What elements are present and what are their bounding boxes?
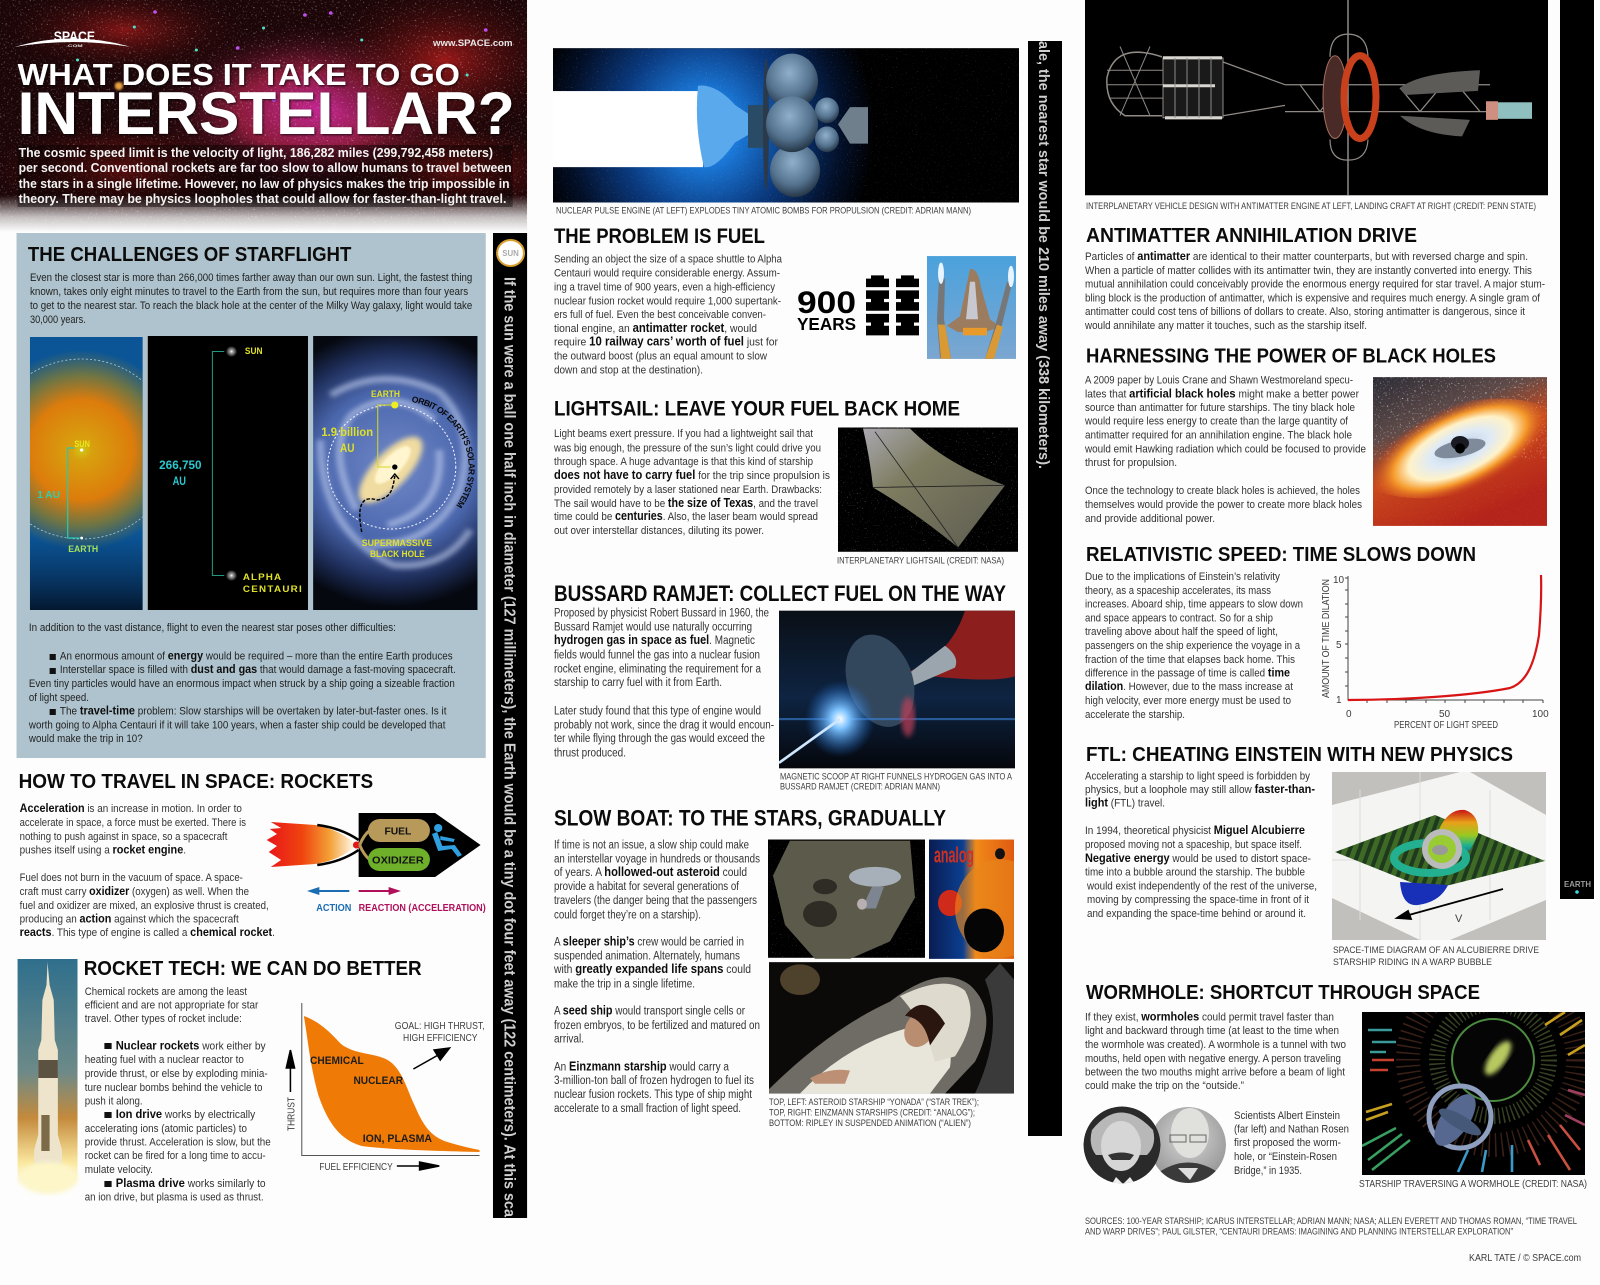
relativity text: difference in the passage of time is called time [1085, 666, 1291, 680]
heading: FTL: CHEATING EINSTEIN WITH NEW PHYSICS [1086, 744, 1513, 766]
analog magazine cover: analog [934, 844, 974, 868]
bussard image [779, 611, 1015, 768]
antimatter text: Particles of antimatter are identical to their matter counterparts, but with reversed charge and spin. [1085, 250, 1528, 263]
relativity text: and space appears to contract. So for a ship [1085, 612, 1273, 624]
fuel text: nuclear fusion rocket would require 1,000 supertank- [554, 295, 781, 307]
black holes text: antimatter required for an annihilation engine. The black hole [1085, 429, 1352, 442]
portrait caption: Scientists Albert Einstein [1234, 1110, 1340, 1122]
rocket tech text: efficient and are not appropriate for star [85, 1000, 259, 1011]
lightsail text: The sail would have to be the size of Texas, and the travel [554, 495, 818, 510]
section: wormhole [1084, 975, 1587, 1190]
heading: RELATIVISTIC SPEED: TIME SLOWS DOWN [1086, 544, 1476, 566]
fuel text: Centauri would require considerable energy. Assum- [554, 267, 780, 280]
diagram: sun to alpha centauri: 266,750 [159, 459, 202, 472]
y axis label: AMOUNT OF TIME DILATION [1321, 579, 1332, 698]
heading: THE PROBLEM IS FUEL [554, 225, 765, 248]
rocket tech text: an ion drive, but plasma is used as thrust. [85, 1192, 264, 1203]
diagram: sun to alpha centauri: AU [173, 475, 186, 488]
intro text: per second. Conventional rockets are far too slow to allow humans to travel between [19, 160, 512, 175]
lightsail text [553, 428, 830, 537]
time dilation chart: 50 [1439, 709, 1451, 720]
caption: bussard: BUSSARD RAMJET (CREDIT: ADRIAN MANN) [780, 781, 940, 792]
rocket tech text: accelerating ions (atomic particles) to [85, 1123, 247, 1135]
diagram: milky way galaxy: ORBIT OF EARTH’S SOLAR SYSTEM [412, 396, 475, 508]
black holes text: lates that artificial black holes might make a better power [1085, 387, 1359, 400]
rocket tech text: travel. Other types of rocket include: [85, 1013, 242, 1025]
portrait caption: (far left) and Nathan Rosen [1234, 1124, 1349, 1136]
wormhole text: the wormhole was created). A wormhole is a tunnel with two [1085, 1039, 1346, 1051]
rocket tech text: Nuclear rockets work either by [116, 1040, 266, 1052]
icon: sun [497, 240, 524, 266]
intro paragraph: 30,000 years. [30, 314, 86, 326]
space shuttle image [927, 256, 1016, 359]
time dilation chart: 0 [1346, 709, 1352, 720]
heading: HARNESSING THE POWER OF BLACK HOLES [1086, 345, 1496, 368]
fuel tank [368, 819, 430, 842]
rocket tech text: provide thrust. Acceleration is slow, but the [85, 1137, 271, 1148]
portrait caption: Bridge,” in 1935. [1234, 1165, 1302, 1177]
diagram: sun to earth 1 AU: EARTH [68, 544, 98, 555]
header banner [0, 0, 579, 232]
oxidizer tank [368, 848, 430, 871]
alcubierre diagram: V [1455, 913, 1463, 925]
rockets text: accelerate in space, a force must be exerted. There is [20, 817, 246, 829]
intro text: The cosmic speed limit is the velocity of light, 186,282 miles (299,792,458 meters) [19, 145, 493, 160]
difficulties list: of light speed. [29, 692, 89, 704]
caption: alcubierre: SPACE-TIME DIAGRAM OF AN ALCUBIERRE DRIVE [1333, 945, 1539, 956]
arrow labels [316, 903, 486, 914]
left column [0, 0, 528, 1218]
logo [14, 29, 131, 48]
black holes text: thrust for propulsion. [1085, 457, 1177, 469]
wormhole text: If they exist, wormholes could permit travel faster than [1085, 1010, 1334, 1024]
difficulties list: Interstellar space is filled with dust and gas that would damage a fast-moving spacecraft. [60, 663, 456, 676]
arrow labels: ACTION [316, 903, 351, 914]
rocket tech text: provide thrust, or else by exploding minia- [85, 1068, 268, 1080]
analog magazine cover [929, 840, 1014, 959]
vertical scale bar 2 [1028, 41, 1062, 1136]
red curve [1348, 575, 1541, 700]
bussard text: ter while flying through the gas would exceed the [554, 733, 765, 745]
asteroid starship image [768, 840, 925, 959]
antimatter text: mutual annihilation could conceivably provide the enormous energy required for star travel. A major stum- [1085, 279, 1545, 291]
FTL text: and expanding the space-time behind or around it. [1087, 908, 1306, 920]
lightsail text: out over interstellar distances, diluting its power. [554, 525, 764, 537]
logo: .COM [66, 43, 84, 48]
x axis label: PERCENT OF LIGHT SPEED [1394, 720, 1498, 731]
rockets text: reacts. This type of engine is called a chemical rocket. [20, 926, 275, 939]
caption: alcubierre: STARSHIP RIDING IN A WARP BUBBLE [1333, 957, 1492, 968]
arrow labels: REACTION (ACCELERATION) [359, 903, 486, 914]
rocket tech text [85, 986, 271, 1203]
diagram: sun to alpha centauri: CENTAURI [243, 584, 302, 595]
FTL text: physics, but a loophole may still allow faster-than- [1085, 783, 1315, 796]
relativity text: fraction of the time that elapses back home. This [1085, 654, 1295, 666]
slow boat text: suspended animation. Alternately, humans [554, 950, 740, 963]
diagram: sun to earth 1 AU [30, 337, 143, 610]
title: WHAT DOES IT TAKE TO GO [18, 56, 460, 92]
goal arrow [413, 1048, 450, 1069]
earth label: EARTH [1564, 879, 1591, 889]
wormhole text: could make the trip on the “outside.” [1085, 1080, 1244, 1092]
rocket diagram [267, 813, 486, 914]
bussard text: hydrogen gas in space as fuel. Magnetic [554, 633, 755, 647]
lightsail text: was big enough, the pressure of the sun’s light could drive you [553, 442, 821, 455]
section: slow boat [553, 806, 1045, 1128]
credit: KARL TATE / © SPACE.com [1469, 1253, 1581, 1264]
difficulties list [28, 622, 456, 745]
thrust vs efficiency chart: NUCLEAR [353, 1075, 403, 1087]
black holes text [1084, 374, 1366, 525]
relativity text: traveling above about half the speed of light, [1085, 626, 1278, 638]
alcubierre diagram [1332, 772, 1546, 940]
heading: SLOW BOAT: TO THE STARS, GRADUALLY [554, 806, 946, 831]
wormhole text: light and backward through time (at least to the time when [1085, 1025, 1339, 1037]
black holes text: and provide additional power. [1085, 513, 1215, 525]
diagram: sun to alpha centauri: SUN [245, 346, 263, 357]
intro text: theory. There may be physics loopholes that could allow for faster-than-light travel. [19, 191, 506, 206]
fuel text: ers full of fuel. Even the best conceivable conven- [554, 309, 766, 321]
portrait caption [1234, 1110, 1349, 1177]
900 years [797, 286, 856, 334]
lightsail image [838, 427, 1018, 552]
bussard text: probably not work, since the drag it would encoun- [554, 719, 774, 732]
slow boat text: with greatly expanded life spans could [553, 962, 751, 976]
section: bussard ramjet [554, 582, 1015, 792]
fuel tank: FUEL [384, 826, 412, 837]
black holes text: A 2009 paper by Louis Crane and Shawn Westmoreland specu- [1085, 374, 1353, 386]
ripley suspended animation image [769, 962, 1014, 1094]
heading: WORMHOLE: SHORTCUT THROUGH SPACE [1086, 982, 1480, 1004]
heading: THE CHALLENGES OF STARFLIGHT [28, 244, 352, 266]
intro paragraph: Even the closest star is more than 266,000 times farther away than our own sun. Light, the fastest thing [30, 272, 472, 284]
wormhole image [1362, 1012, 1585, 1175]
slow boat text: an interstellar voyage in hundreds or thousands [554, 853, 760, 866]
diagram: milky way galaxy: 1.9 billion [321, 426, 373, 439]
wormhole text: mouths, held open with negative energy. A person traveling [1085, 1053, 1341, 1065]
bussard text: Later study found that this type of engine would [554, 705, 761, 718]
rocket tech text: Ion drive works by electrically [116, 1108, 256, 1121]
rockets text: producing an action against which the spacecraft [20, 913, 239, 925]
slow boat text: frozen embryos, to be fertilized and matured on [554, 1020, 760, 1032]
slow boat text: A seed ship would transport single cells or [554, 1003, 745, 1018]
goal label: HIGH EFFICIENCY [403, 1033, 478, 1044]
slow boat text: If time is not an issue, a slow ship could make [554, 839, 749, 851]
heading: HOW TO TRAVEL IN SPACE: ROCKETS [19, 771, 373, 793]
diagram: milky way galaxy [313, 336, 478, 610]
time dilation chart: 100 [1532, 709, 1549, 720]
flame [267, 822, 357, 867]
black holes text: would emit Hawking radiation which could be focused to provide [1084, 443, 1366, 456]
difficulties list: Even tiny particles would have an enormous impact when struck by a ship going a sizeable fraction [29, 678, 455, 690]
slow boat text: make the trip in a single lifetime. [554, 978, 695, 990]
FTL text: time into a bubble around the starship. The bubble [1085, 866, 1305, 878]
slow boat text: A sleeper ship’s crew would be carried in [554, 934, 744, 949]
bussard text: Proposed by physicist Robert Bussard in 1960, the [554, 607, 769, 620]
right column upper part [1084, 0, 1572, 526]
sources [1085, 1216, 1577, 1236]
wormhole text: between the two mouths might arrive before a beam of light [1085, 1066, 1345, 1078]
fuel text: Sending an object the size of a space shuttle to Alpha [554, 253, 783, 266]
slow boat text: An Einzmann starship would carry a [554, 1059, 730, 1074]
vertical scale bar 1 [493, 233, 527, 1218]
caption: alcubierre [1333, 945, 1539, 968]
slow boat text: provide a habitat for several generations of [554, 880, 740, 893]
thrust vs efficiency chart: CHEMICAL [310, 1055, 364, 1067]
antimatter text: bling block is the production of antimatter, which is expensive and requires much energy. A single gram of [1085, 293, 1540, 305]
thrust vs efficiency chart: ION, PLASMA [363, 1133, 432, 1145]
portrait caption: first proposed the worm- [1234, 1137, 1341, 1149]
rocket tech text: mulate velocity. [85, 1164, 153, 1176]
sources: AND WARP DRIVES”; PAUL GILSTER, “CENTAURI DREAMS: IMAGINING AND PLANNING INTERSTELLAR EXPLORATION” [1085, 1226, 1513, 1236]
caption: bussard: MAGNETIC SCOOP AT RIGHT FUNNELS HYDROGEN GAS INTO A [780, 771, 1013, 781]
bussard text: rocket engine, eliminating the requirement for a [554, 663, 762, 676]
website url: www.SPACE.com [432, 38, 513, 49]
900 years: 900 [797, 286, 856, 320]
section: the problem is fuel [554, 225, 1016, 376]
fuel text: down and stop at the destination). [554, 364, 703, 376]
vertical scale bar 3 [1560, 0, 1594, 899]
bussard text: fields would funnel the gas into a nuclear fusion [554, 649, 760, 661]
slow boat text: travelers (the danger being that the passengers [554, 895, 757, 907]
icon: railway cars [866, 275, 919, 335]
caption: antimatter vehicle: INTERPLANETARY VEHICLE DESIGN WITH ANTIMATTER ENGINE AT LEFT, LANDING CRAFT AT RIGHT (CREDIT: PENN STATE) [1086, 201, 1536, 211]
middle column lower part [553, 582, 1045, 1128]
FTL text: moving by compressing the space-time in front of it [1087, 894, 1309, 906]
fuel text: require 10 railway cars’ worth of fuel just for [554, 334, 778, 349]
earth label [1564, 879, 1591, 894]
difficulties list: would make the trip in 10? [28, 733, 143, 745]
relativity text [1085, 571, 1303, 721]
caption: bussard [780, 771, 1013, 792]
FTL text: In 1994, theoretical physicist Miguel Alcubierre [1085, 824, 1306, 837]
section: FTL [1085, 744, 1546, 968]
diagram: sun to alpha centauri [148, 336, 308, 610]
rocket tech text: rocket can be fired for a long time to accu- [85, 1150, 266, 1162]
action arrow [307, 887, 349, 895]
lightsail text: does not have to carry fuel for the trip since propulsion is [554, 468, 830, 482]
orange curve [304, 1016, 480, 1152]
rockets text [20, 802, 275, 939]
wormhole text [1085, 1010, 1346, 1092]
slow boat text: accelerate to a small fraction of light speed. [554, 1103, 741, 1115]
relativity text: high velocity, ever more energy must be used to [1085, 695, 1291, 707]
efficiency arrow [397, 1162, 439, 1170]
heading: BUSSARD RAMJET: COLLECT FUEL ON THE WAY [554, 582, 1006, 606]
diagram: sun to earth 1 AU: 1 AU [37, 489, 60, 501]
FTL text: light (FTL) travel. [1085, 796, 1165, 810]
diagram: milky way galaxy: BLACK HOLE [370, 549, 425, 560]
portrait: Albert Einstein [1084, 1106, 1160, 1184]
section: black holes [1084, 345, 1572, 526]
diagram: sun to earth 1 AU: SUN [74, 439, 90, 450]
slow boat text: nuclear fusion rockets. This type of ship might [554, 1089, 752, 1101]
diagram: milky way galaxy: EARTH [371, 389, 400, 400]
caption: slow boat: TOP, LEFT: ASTEROID STARSHIP “YONADA” (“STAR TREK”); [769, 1097, 979, 1107]
vertical scale text: ale, the nearest star would be 210 miles away (338 kilometers). [1035, 41, 1052, 469]
antimatter vehicle image [1085, 0, 1548, 195]
rocket tech text: push it along. [85, 1096, 143, 1107]
lightsail text: time could be centuries. Also, the laser beam would spread [554, 509, 818, 523]
900 years: YEARS [797, 314, 856, 334]
slow boat text: could forget they’re on a starship). [554, 909, 701, 921]
caption: lightsail: INTERPLANETARY LIGHTSAIL (CREDIT: NASA) [837, 555, 1004, 566]
relativity text: accelerate the starship. [1085, 709, 1185, 721]
intro text: the stars in a single lifetime. However, no law of physics makes the trip impossible in [19, 176, 510, 191]
fuel text: tional engine, an antimatter rocket, would [554, 321, 757, 335]
heading: LIGHTSAIL: LEAVE YOUR FUEL BACK HOME [554, 397, 960, 421]
caption: slow boat: TOP, RIGHT: EINZMANN STARSHIPS (CREDIT: “ANALOG”); [769, 1107, 975, 1118]
fuel text [554, 253, 783, 376]
difficulties list: The travel-time problem: Slow starships will be overtaken by later-but-faster ones. Is it [60, 705, 446, 717]
black hole image [1373, 377, 1547, 526]
antimatter text [1084, 250, 1545, 332]
relativity text: theory, as a spaceship accelerates, its mass [1085, 585, 1271, 597]
antimatter text: would annihilate any matter it touches, such as the starship itself. [1084, 320, 1367, 332]
time dilation chart: 5 [1336, 640, 1342, 651]
bussard text: Bussard Ramjet would use naturally occurring [554, 621, 752, 634]
section: rockets [19, 771, 486, 939]
time dilation chart: 10 [1333, 575, 1345, 586]
slow boat text: of years. A hollowed-out asteroid could [554, 865, 747, 879]
section: rocket tech [18, 958, 485, 1203]
intro paragraph: known, takes only eight minutes to travel to the Earth from the sun, but requires more than four years [30, 286, 468, 298]
relativity text: dilation. However, due to the mass increase at [1085, 680, 1293, 693]
bussard text: starship to carry fuel with it from Earth. [554, 677, 722, 689]
thrust vs efficiency chart [286, 1003, 485, 1173]
antimatter text: antimatter could cost tens of billions of dollars to create. Also, storing antimatter is dangerous, since it [1085, 306, 1525, 318]
intro paragraph: to get to the nearest star. To reach the black hole at the center of the Milky Way galaxy, light would take [30, 300, 472, 312]
oxidizer tank: OXIDIZER [372, 855, 424, 866]
section: antimatter annihilation drive [1084, 224, 1545, 332]
FTL text: Accelerating a starship to light speed is forbidden by [1085, 770, 1311, 782]
FTL text: Negative energy would be used to distort space- [1085, 852, 1311, 865]
portrait: Nathan Rosen [1155, 1107, 1226, 1183]
difficulties list: worth going to Alpha Centauri if it will take 100 years, when a faster ship could be developed that [28, 720, 445, 731]
difficulties list: In addition to the vast distance, flight to even the nearest star poses other difficulties: [29, 622, 396, 634]
rockets text: craft must carry oxidizer (oxygen) as well. When the [20, 885, 249, 898]
goal label [395, 1021, 485, 1044]
thrust label: THRUST [286, 1097, 298, 1131]
diagram: milky way galaxy: AU [340, 442, 354, 455]
antimatter text: When a particle of matter collides with its antimatter twin, they are instantly converted into energy. This [1085, 265, 1532, 277]
slow boat text: arrival. [554, 1033, 584, 1046]
rocket photo [18, 959, 78, 1194]
goal label: GOAL: HIGH THRUST, [395, 1021, 485, 1032]
fuel text: the outward boost (plus an equal amount to slow [554, 350, 767, 363]
lightsail text: Light beams exert pressure. If you had a lightweight sail that [554, 428, 813, 440]
FTL text: proposed moving not a spaceship, but space itself. [1085, 839, 1302, 851]
black holes text: would require less energy to create than the large quantity of [1084, 415, 1348, 428]
caption: nuclear pulse: NUCLEAR PULSE ENGINE (AT LEFT) EXPLODES TINY ATOMIC BOMBS FOR PROPULSION (CREDIT: ADRIAN MANN) [556, 205, 971, 216]
black holes text: Once the technology to create black holes is achieved, the holes [1085, 485, 1360, 497]
diagram: sun to alpha centauri: ALPHA [243, 572, 281, 583]
rockets text: nothing to push against in space, so a spacecraft [20, 831, 227, 843]
time dilation chart [1321, 575, 1549, 731]
hull [359, 813, 481, 877]
time dilation chart: 1 [1336, 695, 1342, 706]
rockets text: Fuel does not burn in the vacuum of space. A space- [20, 872, 243, 884]
rocket tech text: Plasma drive works similarly to [116, 1177, 266, 1190]
middle column upper part [553, 48, 1019, 566]
panel: challenges of starflight [16, 233, 486, 758]
intro paragraph [30, 272, 472, 326]
bussard text [554, 607, 774, 759]
caption: slow boat [769, 1097, 979, 1128]
heading: ROCKET TECH: WE CAN DO BETTER [84, 958, 422, 980]
rocket tech text: Chemical rockets are among the least [85, 986, 247, 998]
slow boat text [553, 839, 760, 1115]
difficulties list: An enormous amount of energy would be required – more than the entire Earth produces [60, 650, 453, 662]
rockets text: pushes itself using a rocket engine. [20, 844, 186, 856]
section: lightsail [553, 397, 1018, 566]
icon: sun: SUN [502, 249, 519, 258]
slow boat text: 3-million-ton ball of frozen hydrogen to fuel its [554, 1075, 754, 1087]
caption: slow boat: BOTTOM: RIPLEY IN SUSPENDED ANIMATION (“ALIEN”) [769, 1118, 971, 1128]
rockets text: Acceleration is an increase in motion. In order to [20, 802, 242, 815]
portrait caption: hole, or “Einstein-Rosen [1234, 1151, 1337, 1163]
relativity text: passengers on the ship experience the voyage in a [1085, 640, 1300, 652]
rocket tech text: heating fuel with a nuclear reactor to [85, 1054, 244, 1066]
fuel text: ing a travel time of 900 years, even a high-efficiency [554, 281, 775, 293]
section: relativistic speed [1085, 544, 1549, 731]
heading: ANTIMATTER ANNIHILATION DRIVE [1086, 224, 1417, 247]
lightsail text: provided remotely by a laser stationed near Earth. Drawbacks: [554, 484, 822, 496]
icon: astronaut [432, 824, 462, 857]
intro text [18, 145, 513, 207]
relativity text: increases. Aboard ship, time appears to slow down [1085, 598, 1303, 610]
black holes text: source than antimatter for future starships. The tiny black hole [1085, 402, 1355, 414]
nuclear pulse engine image [553, 48, 1019, 202]
fuel efficiency label: FUEL EFFICIENCY [319, 1162, 393, 1173]
FTL text: would exist independently of the rest of the universe, [1086, 880, 1317, 892]
thrust arrow [286, 1050, 295, 1092]
diagram: milky way galaxy: SUPERMASSIVE [362, 538, 433, 549]
title: INTERSTELLAR? [18, 80, 515, 147]
relativity text: Due to the implications of Einstein’s relativity [1085, 571, 1281, 583]
lightsail text: through space. A huge advantage is that this kind of starship [554, 456, 813, 468]
rockets text: fuel and oxidizer are mixed, an explosive thrust is created, [20, 900, 269, 912]
FTL text [1085, 770, 1317, 920]
black holes text: themselves would provide the power to create more black holes [1085, 499, 1362, 511]
vertical scale text: If the sun were a ball one half inch in diameter (127 millimeters), the Earth would be a tiny dot four feet away (122 centimeters). At this sca [500, 277, 518, 1217]
rocket tech text: ture nuclear bombs behind the vehicle to [85, 1082, 263, 1094]
logo: SPACE [54, 29, 95, 45]
reaction arrow [359, 887, 401, 895]
bussard text: thrust produced. [554, 747, 626, 759]
